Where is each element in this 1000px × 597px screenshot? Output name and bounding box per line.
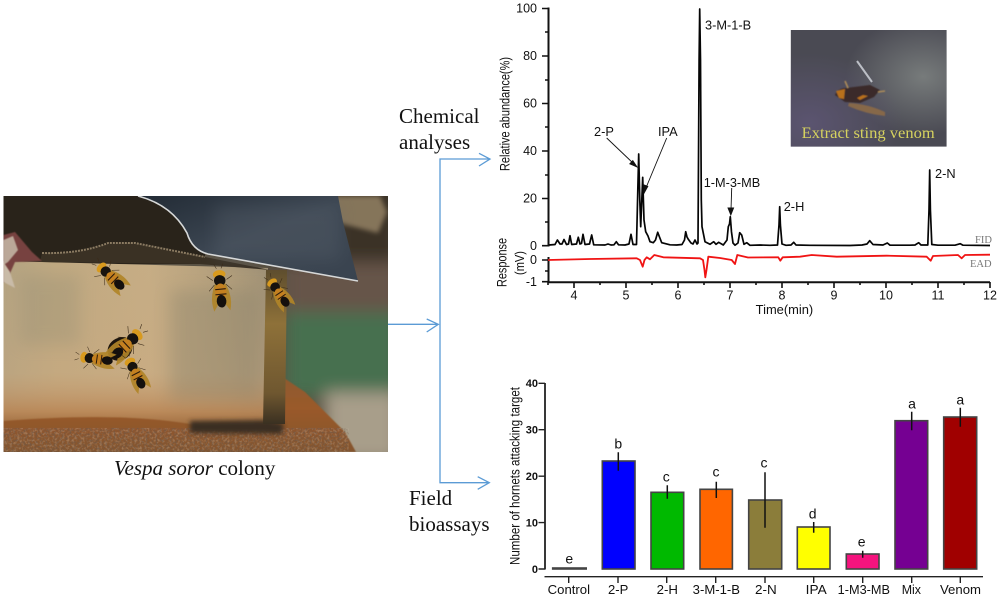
y axis title: Number of hornets attacking target: [508, 387, 522, 565]
x tick labels: 10: [879, 288, 893, 302]
y tick labels: [516, 2, 537, 289]
y tick labels: 0: [530, 239, 537, 253]
x tick labels: 8: [779, 288, 786, 302]
heading: Field bioassays: bioassays: [409, 512, 490, 536]
y tick labels: 0: [532, 564, 538, 576]
x tick labels: 6: [675, 288, 682, 302]
heading: Field bioassays: Field: [409, 486, 452, 510]
cardboard strip: [40, 243, 270, 270]
x tick labels: 9: [831, 288, 838, 302]
y tick labels: 80: [523, 49, 537, 63]
category labels: Venom: [940, 583, 981, 597]
y tick labels: 60: [523, 96, 537, 110]
x tick labels: 12: [983, 288, 997, 302]
box side: [263, 270, 287, 424]
arrow: colony to branches: [388, 319, 438, 332]
significance letters: e: [565, 550, 573, 566]
axis titles: Relative abundance(%): [498, 57, 512, 171]
heading: Chemical analyses: Chemical: [399, 104, 479, 128]
category labels: 2-P: [608, 583, 628, 597]
trace labels: FID: [975, 235, 992, 246]
y tick labels: 20: [523, 192, 537, 206]
y tick labels: -1: [526, 275, 537, 289]
significance letters: c: [663, 468, 670, 484]
x tick labels: 11: [932, 288, 945, 302]
significance letters: a: [956, 392, 964, 408]
photo: Vespa soror colony: [4, 196, 388, 452]
peak labels: 2-H: [784, 199, 804, 214]
axes: [542, 8, 990, 288]
category labels: Mix: [902, 583, 922, 597]
axes: [538, 383, 983, 583]
EAD trace: [548, 255, 990, 277]
caption: Vespa soror colony: Vespa soror colony: [114, 456, 276, 480]
peak arrows: [607, 138, 734, 215]
category labels: 2-N: [755, 583, 777, 597]
wood box: [4, 261, 268, 432]
significance letters: c: [760, 454, 768, 470]
meat bait: [4, 232, 42, 283]
significance letters: c: [712, 464, 720, 480]
inset caption: Extract sting venom: [802, 125, 935, 142]
category labels: IPA: [806, 583, 827, 597]
metal roof: [138, 196, 358, 281]
significance letters: [565, 392, 964, 566]
category labels: 1-M3-MB: [838, 583, 890, 597]
significance letters: d: [809, 506, 817, 522]
arrow: branch to field bioassays: [440, 324, 489, 489]
significance letters: a: [908, 396, 916, 412]
y tick labels: 0: [530, 253, 537, 267]
peak labels: 2-P: [594, 124, 614, 139]
y tick labels: 40: [526, 378, 538, 390]
chart: chromatogram FID and EAD: Time(min): [756, 302, 813, 317]
heading: Chemical analyses: analyses: [399, 130, 470, 154]
peak labels: [594, 18, 956, 214]
x tick labels: [571, 288, 997, 302]
arrow: branch to chemical analyses: [440, 153, 490, 324]
nest entrance hole: [108, 338, 132, 361]
y tick labels: 100: [516, 2, 537, 16]
venom capillary: [857, 61, 872, 82]
category labels: Control: [548, 583, 590, 597]
x tick labels: 7: [727, 288, 734, 302]
category labels: [548, 583, 981, 597]
chart: field bioassay bars: [508, 378, 983, 597]
hornet specimen: [835, 81, 885, 116]
chart: chromatogram FID and EAD: (mV): [512, 251, 527, 275]
y tick labels: 20: [526, 471, 538, 483]
hornets: [74, 253, 299, 396]
peak labels: IPA: [658, 124, 678, 139]
trace labels: [970, 235, 992, 270]
significance letters: e: [858, 534, 866, 550]
soil: [4, 378, 356, 452]
category labels: 2-H: [657, 583, 678, 597]
trace labels: EAD: [970, 259, 992, 270]
significance letters: b: [614, 436, 622, 452]
peak labels: 1-M-3-MB: [704, 175, 760, 190]
peak labels: 2-N: [935, 166, 956, 181]
chart: chromatogram FID and EAD: [494, 2, 997, 317]
FID trace: [549, 9, 990, 246]
x tick labels: 5: [623, 288, 630, 302]
y tick labels: [526, 378, 538, 576]
y tick labels: 10: [526, 518, 538, 530]
category labels: 3-M-1-B: [693, 583, 740, 597]
chart: chromatogram FID and EAD: Response: [494, 238, 510, 287]
bars: [553, 417, 977, 569]
error bars: [618, 408, 960, 558]
inset photo: extract sting venom: [791, 30, 947, 147]
y tick labels: 40: [523, 144, 537, 158]
peak labels: 3-M-1-B: [705, 18, 751, 32]
x tick labels: 4: [571, 288, 578, 302]
y tick labels: 30: [526, 424, 538, 436]
